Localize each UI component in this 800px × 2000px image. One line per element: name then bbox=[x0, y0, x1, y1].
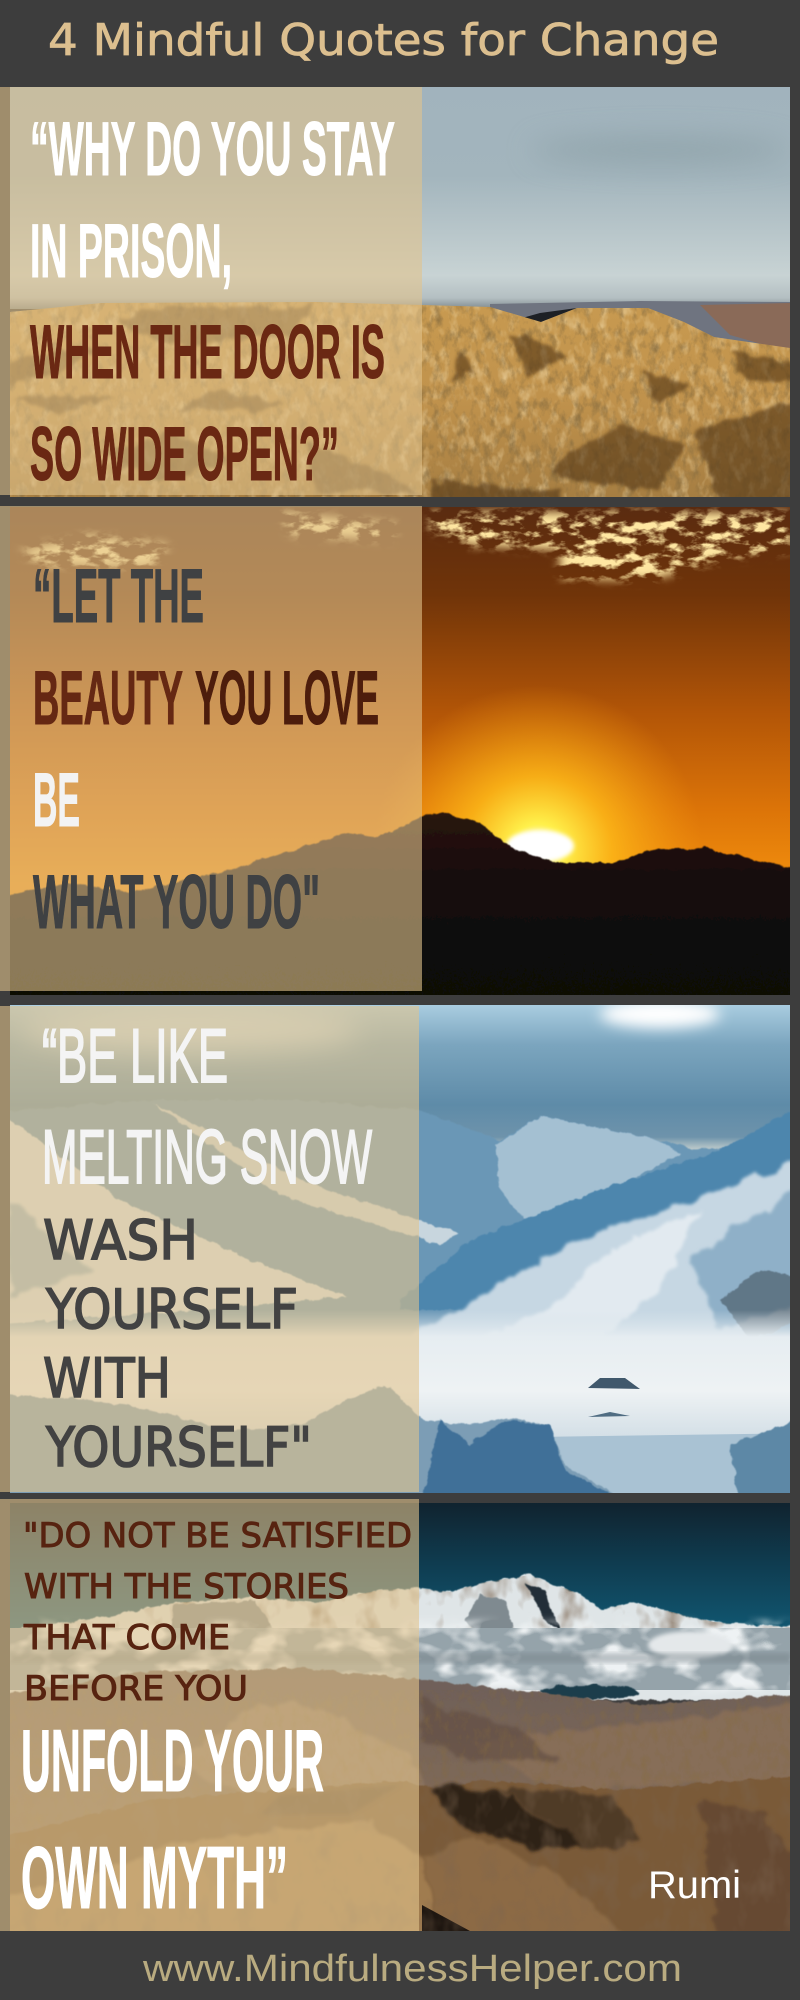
condensed white lines bbox=[42, 1014, 372, 1200]
quote text: “LET THE bbox=[33, 554, 204, 639]
panel: quote 1, desert mountain: WHEN THE DOOR IS bbox=[30, 310, 385, 395]
panel: quote 4, high peaks bbox=[0, 1499, 800, 1950]
left slope under overlay bbox=[10, 1120, 346, 1324]
valley floor bbox=[0, 1310, 800, 1445]
wide dark lines bbox=[43, 1209, 312, 1479]
wide dark lines: YOURSELF bbox=[45, 1278, 298, 1341]
quote text: IN PRISON, bbox=[30, 209, 232, 294]
wide brown lines: BEFORE YOU bbox=[24, 1669, 248, 1709]
photo: sunset behind dark ridge bbox=[0, 507, 800, 1020]
condensed white lines bbox=[21, 1711, 324, 1927]
wide brown lines: "DO NOT BE SATISFIED bbox=[23, 1516, 412, 1556]
overlay: translucent tan column bbox=[0, 506, 422, 991]
quote text: BE bbox=[33, 758, 80, 843]
quote text bbox=[21, 1516, 412, 1927]
panel: quote 3, snow valley bbox=[0, 1000, 800, 1510]
quote text: UNFOLD YOUR bbox=[21, 1711, 324, 1810]
footer url: www.MindfulnessHelper.com bbox=[142, 1948, 682, 1990]
foreground mounds bbox=[554, 1434, 760, 1493]
quote text: BEAUTY bbox=[33, 656, 183, 741]
overlay: translucent tan column bbox=[0, 1006, 419, 1492]
panel: quote 2, sunset: YOU LOVE bbox=[195, 656, 379, 741]
quote text: SO WIDE OPEN?” bbox=[30, 412, 339, 497]
title: 4 Mindful Quotes for Change bbox=[48, 15, 719, 66]
wide brown lines: WITH THE STORIES bbox=[24, 1567, 349, 1607]
wide dark lines: WITH bbox=[43, 1347, 171, 1410]
quote text: WHAT YOU DO" bbox=[33, 860, 320, 945]
photo: snow covered valley bbox=[0, 1000, 800, 1510]
overlay: translucent tan column bbox=[0, 1499, 419, 1931]
attribution: Rumi: Rumi bbox=[648, 1864, 741, 1907]
condensed white lines: OWN MYTH” bbox=[21, 1828, 288, 1927]
panel: quote 1, desert mountain bbox=[0, 87, 800, 510]
wide dark lines: YOURSELF" bbox=[45, 1416, 312, 1479]
condensed white lines: MELTING SNOW bbox=[42, 1115, 372, 1200]
far ridges bbox=[10, 1110, 724, 1332]
panel: quote 2, sunset bbox=[0, 506, 800, 1020]
near snow slopes bbox=[419, 1158, 790, 1334]
panel: quote 1, desert mountain: “WHY DO YOU STAY bbox=[30, 107, 395, 192]
photo: snowy peak above brown hills bbox=[0, 1503, 800, 1950]
wide brown lines: THAT COME bbox=[23, 1618, 230, 1658]
overlay: translucent tan column bbox=[0, 87, 422, 495]
photo: desert mesa under pale sky bbox=[10, 87, 800, 510]
quote text bbox=[42, 1014, 372, 1479]
condensed white lines: “BE LIKE bbox=[42, 1014, 228, 1099]
quote text bbox=[33, 554, 379, 945]
quote text bbox=[30, 107, 395, 497]
wide dark lines: WASH bbox=[43, 1209, 198, 1272]
wide brown lines bbox=[23, 1516, 412, 1709]
